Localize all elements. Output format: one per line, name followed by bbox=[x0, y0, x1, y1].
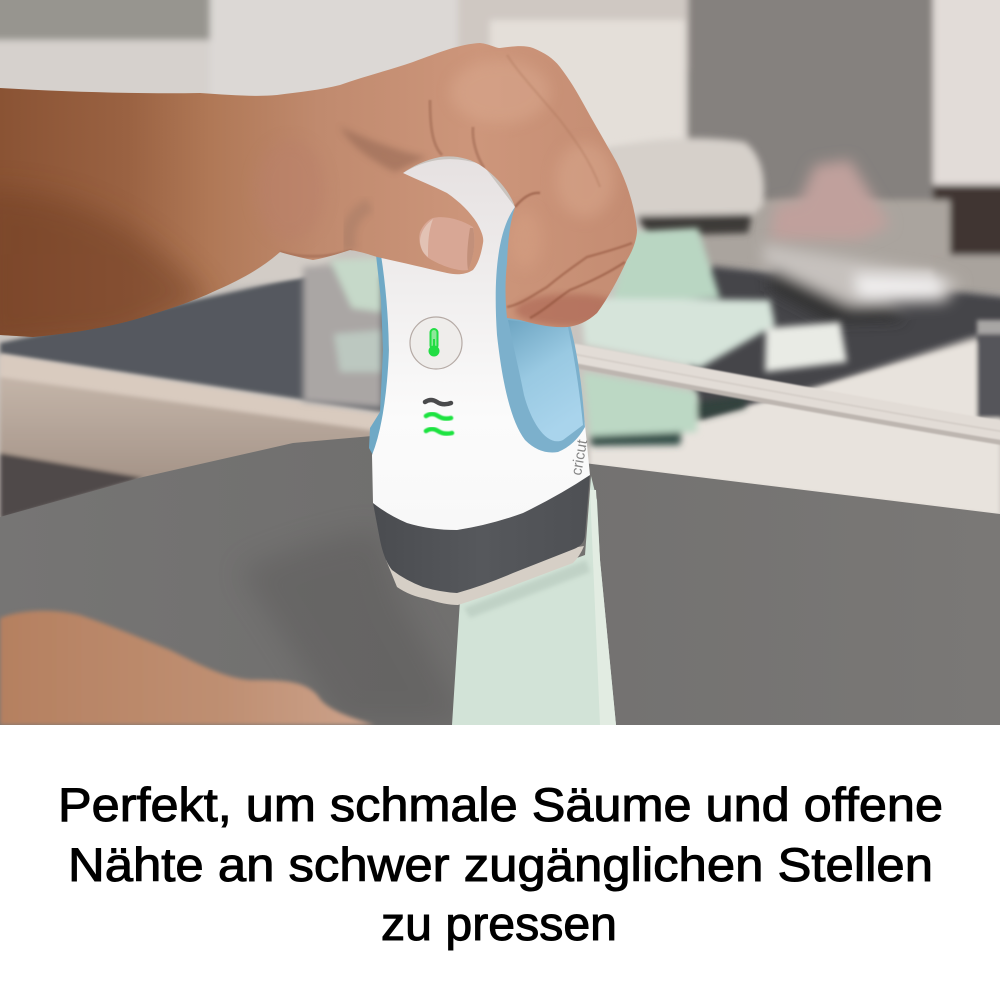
ironing board bbox=[0, 436, 1000, 725]
iron: cricut logo: cricut bbox=[568, 438, 591, 477]
mini iron bbox=[369, 159, 591, 605]
power cord bbox=[573, 353, 1000, 434]
background: gray table and scissors-like tool bbox=[762, 244, 960, 322]
background: left and right cutting mats bbox=[0, 277, 385, 412]
iron: left blue strip bbox=[369, 255, 389, 457]
caption: zu pressen bbox=[381, 897, 617, 950]
lower hand bbox=[0, 611, 375, 725]
background: white table edge bbox=[0, 250, 1000, 520]
hand shading: forearm, knuckles and finger creases bbox=[0, 55, 632, 350]
caption: Nähte an schwer zugänglichen Stellen bbox=[68, 838, 933, 891]
iron: heat level waves bbox=[425, 400, 452, 434]
inner well bbox=[508, 320, 583, 441]
blue rim bbox=[496, 207, 585, 452]
background: right cutting mat bbox=[680, 266, 1000, 420]
blurred studio background bbox=[0, 0, 1000, 517]
background: cutting machine bbox=[608, 138, 764, 236]
hand gripping the iron bbox=[0, 43, 637, 350]
background: pink craft items bbox=[770, 160, 890, 240]
mint fabric strip bbox=[452, 476, 616, 725]
iron: blue handle opening bbox=[496, 207, 585, 452]
caption: Perfekt, um schmale Säume und offene bbox=[58, 778, 943, 831]
iron: metal soleplate bbox=[386, 546, 584, 605]
iron: temperature button bbox=[410, 317, 462, 369]
photo: hand pressing a seam with a mini iron bbox=[0, 0, 1000, 725]
caption bbox=[58, 778, 943, 950]
thermometer icon bbox=[428, 329, 440, 356]
background: translucent box and mint fabric bbox=[303, 228, 847, 446]
thumbnail bbox=[419, 217, 474, 270]
iron: white body bbox=[372, 159, 590, 530]
iron: dark base band bbox=[373, 473, 590, 593]
